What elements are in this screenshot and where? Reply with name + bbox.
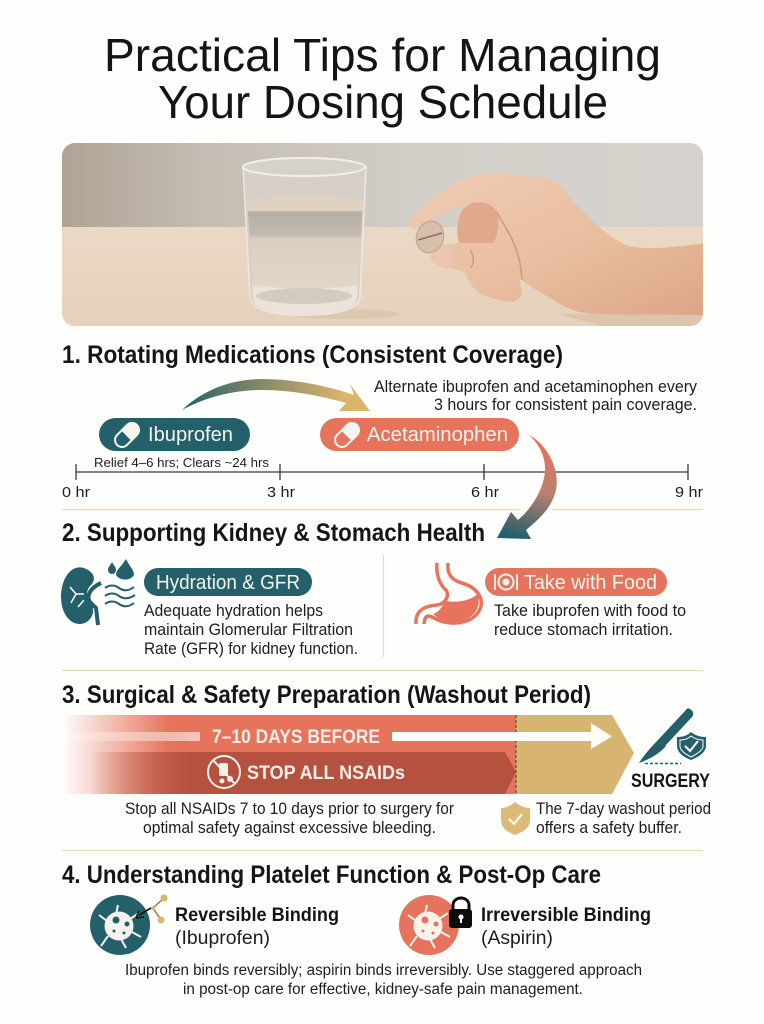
text: hydration detail: Rate (GFR) for kidney function. bbox=[144, 639, 358, 658]
arrow: ibuprofen to acetaminophen bbox=[182, 379, 370, 411]
section 3 heading: 3. Surgical & Safety Preparation (Washout Period) bbox=[62, 681, 591, 709]
label: hydration and GFR: Hydration & GFR bbox=[156, 571, 300, 594]
washout timeline banner bbox=[62, 715, 634, 794]
photo: hand holding a tablet beside a glass of water bbox=[62, 143, 706, 326]
pill: ibuprofen: Ibuprofen bbox=[148, 423, 233, 446]
icon: capsule bbox=[332, 420, 362, 450]
panel: stomach bbox=[416, 563, 686, 639]
text: hydration detail bbox=[144, 601, 358, 658]
note: alternate every 3 hours bbox=[374, 377, 697, 414]
title: Your Dosing Schedule bbox=[158, 76, 608, 128]
section 4 heading: 4. Understanding Platelet Function & Post-Op Care bbox=[62, 861, 601, 889]
text: platelet summary: in post-op care for effective, kidney-safe pain management. bbox=[183, 981, 583, 998]
title: Practical Tips for Managing bbox=[104, 29, 661, 81]
icon: irreversible platelet with lock bbox=[399, 895, 472, 955]
icon: tablet bbox=[416, 220, 444, 254]
ibuprofen relief note: Relief 4–6 hrs; Clears ~24 hrs bbox=[94, 455, 269, 470]
label: take with food: Take with Food bbox=[524, 571, 657, 594]
text: food detail bbox=[494, 601, 686, 639]
label: irreversible binding bbox=[481, 904, 651, 949]
icon: reversible platelet bbox=[90, 894, 168, 955]
timeline: 9 hr bbox=[675, 484, 703, 501]
label: irreversible binding: (Aspirin) bbox=[481, 927, 553, 949]
text: stop NSAIDs detail bbox=[125, 799, 454, 837]
label: stop all NSAIDs: STOP ALL NSAIDs bbox=[247, 762, 405, 784]
pill: ibuprofen bbox=[99, 418, 250, 451]
label: reversible binding bbox=[175, 904, 339, 949]
label: surgery: SURGERY bbox=[631, 771, 710, 792]
note: alternate every 3 hours: Alternate ibuprofen and acetaminophen every bbox=[374, 377, 697, 396]
infographic canvas bbox=[61, 38, 710, 998]
text: hydration detail: maintain Glomerular Filtration bbox=[144, 620, 353, 639]
arrow: acetaminophen to section 2 bbox=[497, 435, 557, 539]
timeline: 0 hr bbox=[62, 484, 90, 501]
arrow: countdown bbox=[392, 723, 612, 749]
section 1 heading: 1. Rotating Medications (Consistent Coverage) bbox=[62, 341, 563, 369]
label: reversible binding: (Ibuprofen) bbox=[175, 927, 270, 949]
icon: plate and cutlery bbox=[495, 574, 517, 590]
icon: stomach bbox=[416, 563, 481, 624]
icon: gold shield bbox=[501, 802, 530, 835]
text: hydration detail: Adequate hydration helps bbox=[144, 601, 323, 620]
text: platelet summary bbox=[125, 962, 642, 998]
icon: kidney and water bbox=[61, 559, 135, 625]
text: washout detail: The 7-day washout period bbox=[536, 799, 711, 818]
icon: no medication bbox=[208, 756, 240, 788]
timeline: 6 hr bbox=[471, 484, 499, 501]
text: food detail: Take ibuprofen with food to bbox=[494, 601, 686, 620]
text: washout detail: offers a safety buffer. bbox=[536, 818, 682, 837]
icon: capsule bbox=[112, 420, 142, 450]
panel: hydration bbox=[61, 559, 358, 658]
title bbox=[104, 29, 661, 128]
text: stop NSAIDs detail: Stop all NSAIDs 7 to 10 days prior to surgery for bbox=[125, 799, 454, 818]
timeline: 3 hr bbox=[267, 484, 295, 501]
text: platelet summary: Ibuprofen binds reversibly; aspirin binds irreversibly. Use staggered approach bbox=[125, 962, 642, 979]
section 2 heading: 2. Supporting Kidney & Stomach Health bbox=[62, 519, 485, 547]
text: food detail: reduce stomach irritation. bbox=[494, 620, 673, 639]
label: take with food bbox=[485, 568, 667, 596]
icon: scalpel and shield bbox=[639, 708, 706, 764]
timeline bbox=[62, 464, 703, 501]
label: reversible binding: Reversible Binding bbox=[175, 904, 339, 926]
pill: acetaminophen bbox=[320, 418, 519, 451]
pill: acetaminophen: Acetaminophen bbox=[367, 423, 508, 446]
label: 7-10 days before: 7–10 DAYS BEFORE bbox=[212, 727, 380, 748]
text: stop NSAIDs detail: optimal safety against excessive bleeding. bbox=[143, 818, 436, 837]
note: alternate every 3 hours: 3 hours for consistent pain coverage. bbox=[434, 395, 697, 414]
text: washout detail bbox=[536, 799, 711, 837]
label: irreversible binding: Irreversible Binding bbox=[481, 904, 651, 926]
